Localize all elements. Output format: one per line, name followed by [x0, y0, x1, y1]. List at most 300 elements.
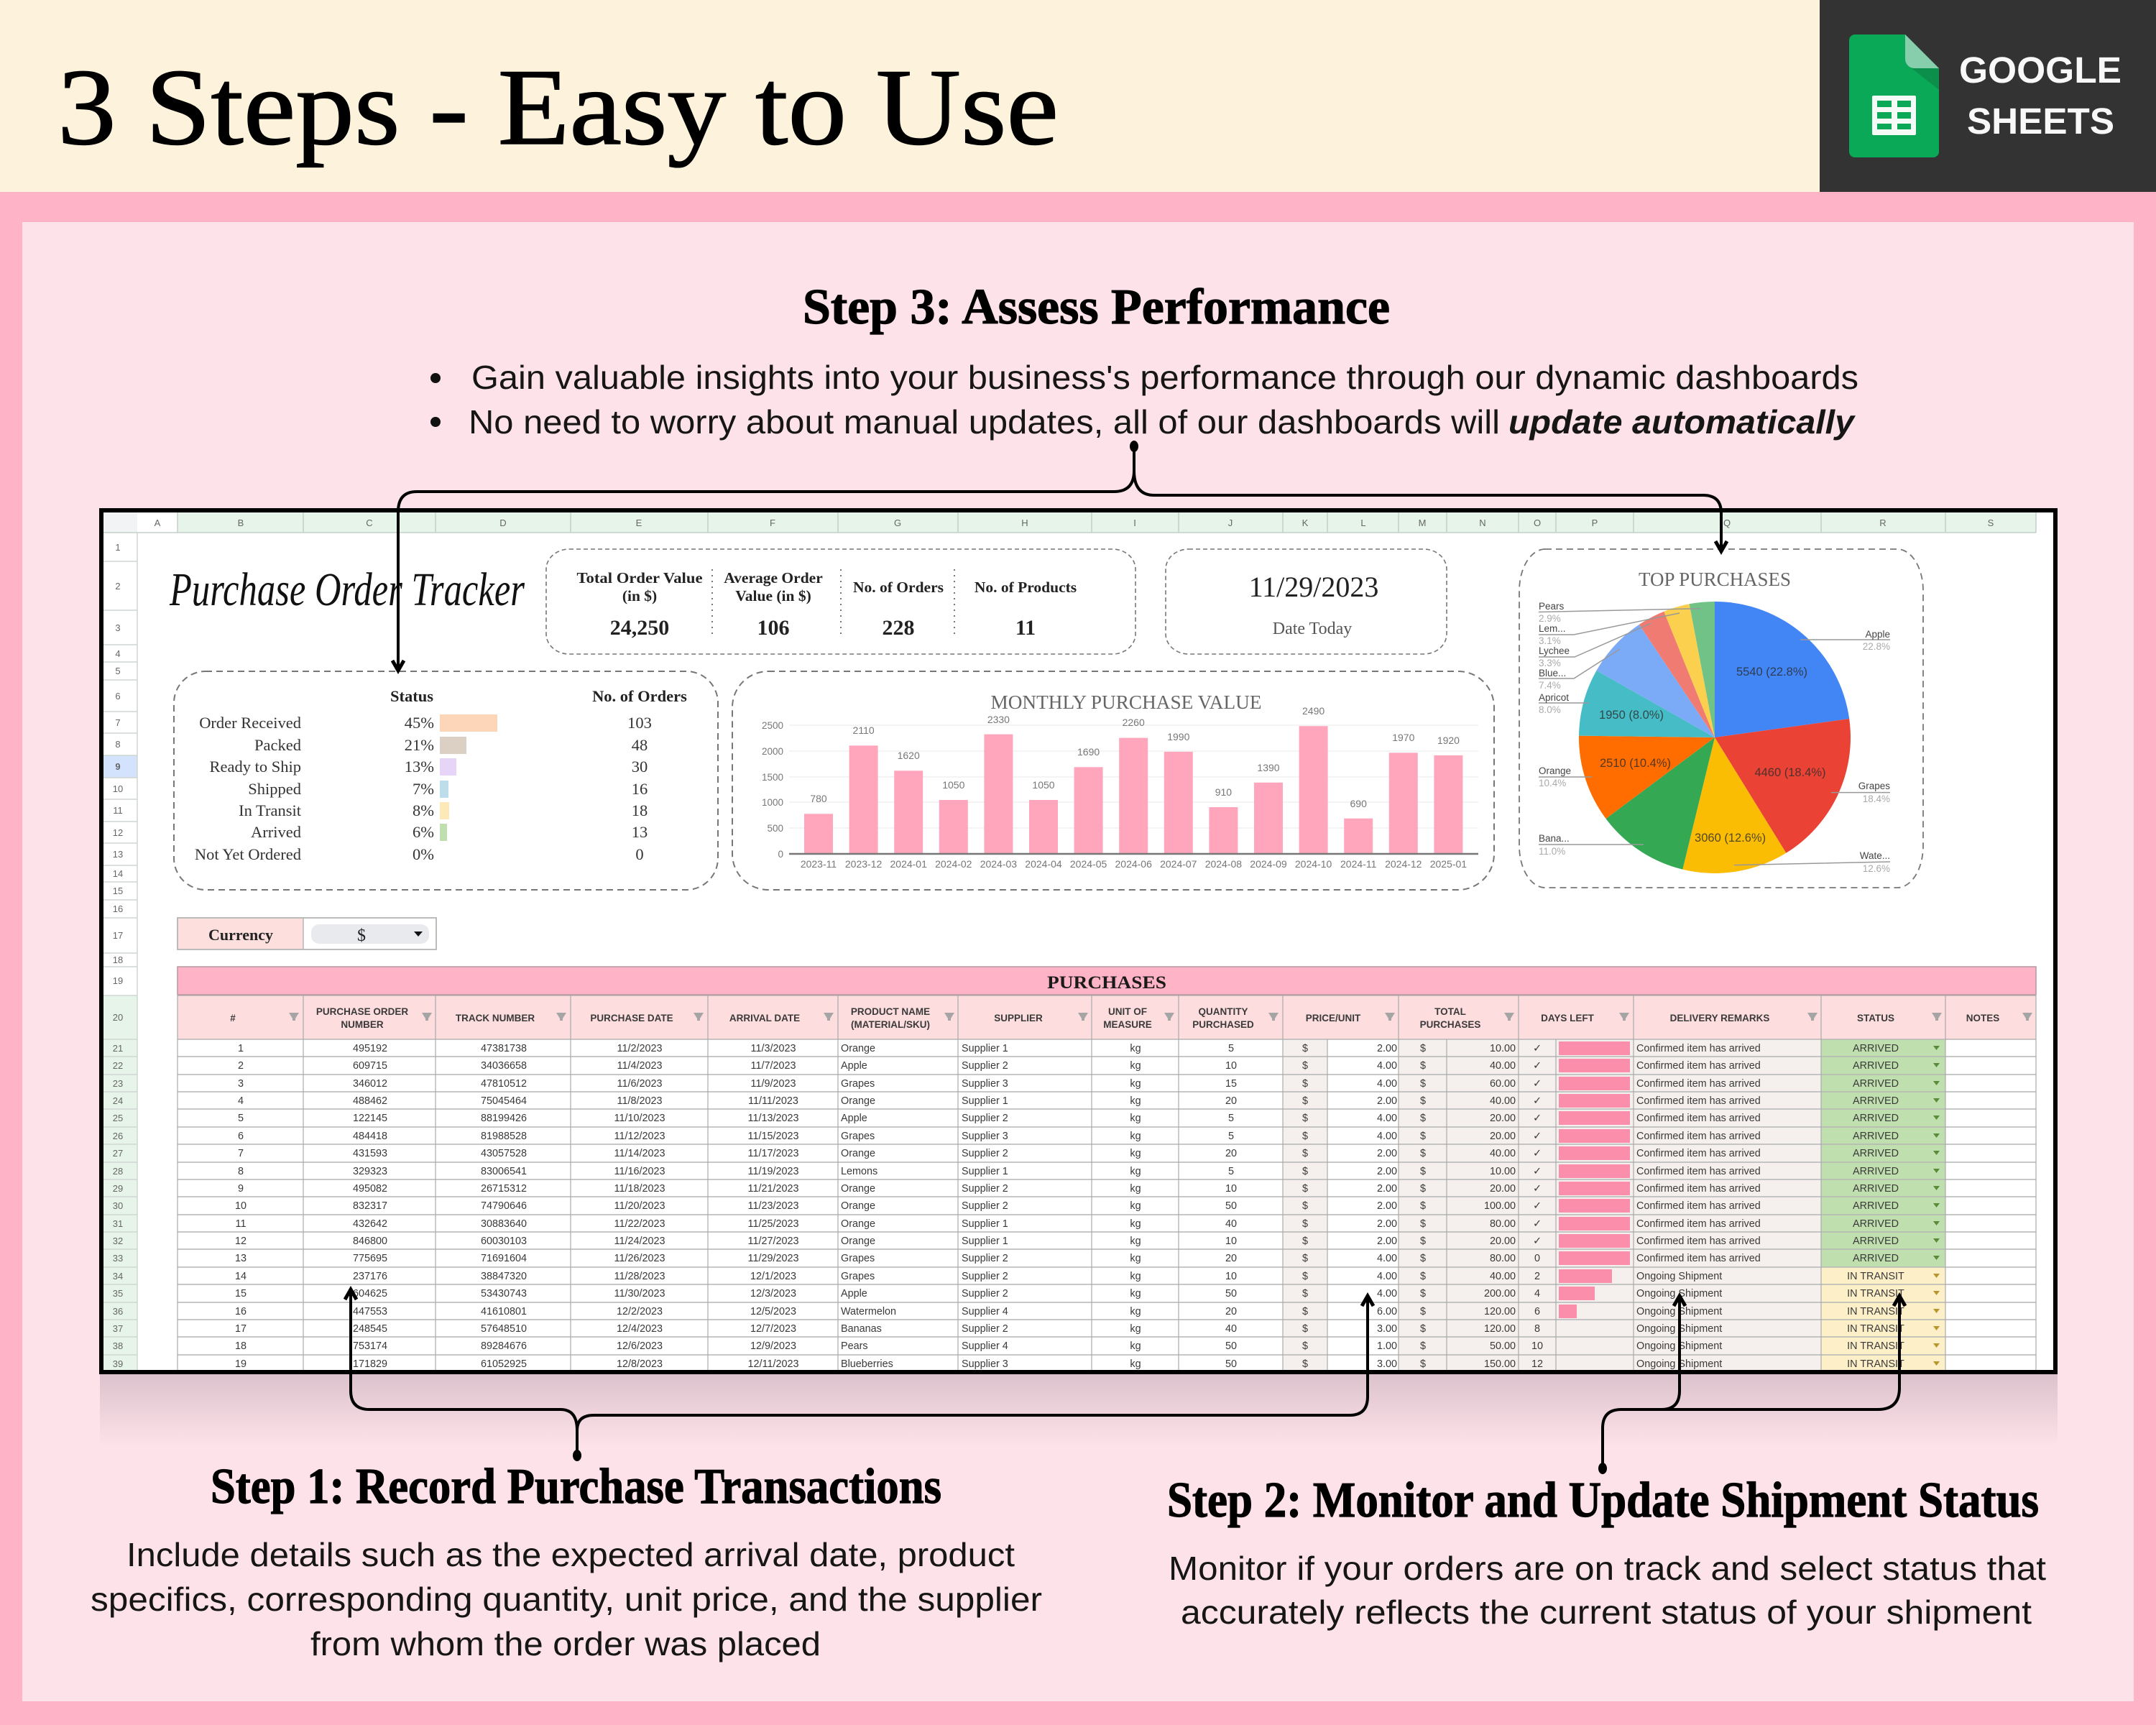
table row 8: 329323 [353, 1166, 387, 1177]
table row 2: 11/7/2023 [751, 1060, 796, 1072]
table row 12: ✓ [1533, 1236, 1542, 1247]
table: purchases [178, 967, 2036, 1371]
table row 12: Orange [841, 1236, 875, 1247]
table row 12: Confirmed item has arrived [1636, 1236, 1761, 1247]
table row 19: Supplier 3 [962, 1358, 1008, 1370]
bar value labels: 1050 [942, 779, 965, 791]
table column headers: PRODUCT NAME [851, 1006, 930, 1017]
column headers: B [238, 518, 244, 528]
table row 19: 61052925 [481, 1358, 527, 1370]
month labels: 2024-12 [1385, 858, 1422, 870]
table row 15: $ [1420, 1288, 1426, 1300]
column headers: P [1592, 518, 1598, 528]
table row 5 [238, 1113, 1940, 1124]
column headers: J [1228, 518, 1233, 528]
table row 3: 4.00 [1377, 1078, 1397, 1090]
table row 14: 10 [1225, 1271, 1237, 1282]
table row 6: $ [1420, 1131, 1426, 1142]
table row 14: kg [1130, 1271, 1141, 1282]
table row 16: $ [1302, 1306, 1308, 1317]
table row 16: 20 [1225, 1306, 1237, 1317]
table row 18: $ [1302, 1340, 1308, 1352]
panel: top purchases pie chart: TOP PURCHASES [1639, 569, 1791, 590]
table row 15: 604625 [353, 1288, 387, 1300]
table row 4: 20 [1225, 1095, 1237, 1107]
table row 7: $ [1302, 1148, 1308, 1159]
table row 11: 11/25/2023 [748, 1218, 798, 1230]
table row 14: Ongoing Shipment [1636, 1271, 1722, 1282]
y axis labels: 1000 [762, 797, 783, 808]
table row 13: kg [1130, 1253, 1141, 1264]
bar value labels: 1970 [1392, 732, 1415, 743]
status labels [195, 714, 652, 863]
table row 2: 11/4/2023 [617, 1060, 662, 1072]
table row 16: 6.00 [1377, 1306, 1397, 1317]
row headers: 32 [113, 1236, 123, 1246]
table row 9: 26715312 [481, 1183, 527, 1195]
table row 4: 11/11/2023 [748, 1095, 798, 1107]
table row 12: 60030103 [481, 1236, 527, 1247]
table row 12: $ [1420, 1236, 1426, 1247]
pie callout labels: Bana... [1539, 833, 1570, 844]
table row 17: 3.00 [1377, 1323, 1397, 1335]
column headers: N [1479, 518, 1486, 528]
status labels: Order Received [199, 714, 301, 732]
table row 10: 100.00 [1484, 1200, 1516, 1212]
table row 13: 11/29/2023 [748, 1253, 798, 1264]
pie callout labels: 3.1% [1539, 635, 1561, 646]
table row 4: $ [1420, 1095, 1426, 1107]
table row 9: 9 [238, 1183, 244, 1195]
row headers: 25 [113, 1113, 123, 1123]
table title band [178, 967, 2036, 995]
table row 3: 11/9/2023 [751, 1078, 796, 1090]
panel: KPI summary [546, 549, 1135, 654]
table row 16: 16 [235, 1306, 247, 1317]
pie callout labels: 3.3% [1539, 658, 1561, 668]
bar value labels: 690 [1350, 798, 1367, 809]
table row 1: Supplier 1 [962, 1043, 1008, 1054]
badge: Google Sheets [1820, 0, 2156, 192]
table row 7: $ [1420, 1148, 1426, 1159]
table row 1: $ [1420, 1043, 1426, 1054]
table row 8: 83006541 [481, 1166, 527, 1177]
row headers: 35 [113, 1288, 123, 1299]
row headers: 31 [113, 1218, 123, 1229]
status labels: Not Yet Ordered [195, 845, 301, 863]
table row 7: 431593 [353, 1148, 387, 1159]
table row 4: 488462 [353, 1095, 387, 1107]
table row 10: $ [1302, 1200, 1308, 1212]
table row 6: Confirmed item has arrived [1636, 1131, 1761, 1142]
text block: step 3 bullets: Gain valuable insights into your business's performance through our dynamic dashboards [471, 359, 1858, 396]
table row 5: $ [1302, 1113, 1308, 1124]
table row 11: Orange [841, 1218, 875, 1230]
table row 1: 1 [238, 1043, 244, 1054]
table row 4 [238, 1095, 1940, 1107]
bar value labels: 1990 [1167, 731, 1190, 742]
table row 12 [235, 1236, 1940, 1247]
month labels: 2023-11 [801, 858, 837, 870]
table row 17: 8 [1534, 1323, 1540, 1335]
currency selector: Currency [208, 926, 273, 944]
status labels: 6% [413, 823, 434, 841]
pie callout labels: Lem... [1539, 623, 1566, 634]
table row 3: 11/6/2023 [617, 1078, 662, 1090]
KPI: number of products [975, 579, 1077, 640]
table row 15: 200.00 [1484, 1288, 1516, 1300]
table row 9: Confirmed item has arrived [1636, 1183, 1761, 1195]
table row 14: Grapes [841, 1271, 875, 1282]
KPI: number of orders: No. of Orders [853, 579, 944, 596]
table row 2: Confirmed item has arrived [1636, 1060, 1761, 1072]
table row 9: $ [1420, 1183, 1426, 1195]
row headers: 17 [113, 930, 123, 941]
table column headers: DAYS LEFT [1541, 1013, 1595, 1024]
table row 9 [238, 1183, 1940, 1195]
table row 8: kg [1130, 1166, 1141, 1177]
KPI: average order value [724, 569, 823, 640]
table row 4: Orange [841, 1095, 875, 1107]
table column headers [178, 995, 2036, 1039]
table row 10: Confirmed item has arrived [1636, 1200, 1761, 1212]
table row 5: 122145 [353, 1113, 387, 1124]
pie callout labels: 2.9% [1539, 613, 1561, 624]
table row 13: 0 [1534, 1253, 1540, 1264]
table row 15: kg [1130, 1288, 1141, 1300]
table row 6: 484418 [353, 1131, 387, 1142]
column headers: Q [1723, 518, 1731, 528]
row headers: 30 [113, 1200, 123, 1211]
table row 6: ARRIVED [1853, 1131, 1899, 1142]
table row 16: Watermelon [841, 1306, 896, 1317]
table row 3: Confirmed item has arrived [1636, 1078, 1761, 1090]
month labels: 2024-09 [1250, 858, 1287, 870]
pie callout labels: 22.8% [1863, 641, 1890, 652]
table row 4: 75045464 [481, 1095, 527, 1107]
row headers: 37 [113, 1323, 123, 1334]
table row 9: 20.00 [1490, 1183, 1516, 1195]
row headers: 22 [113, 1060, 123, 1071]
table row 14: 237176 [353, 1271, 387, 1282]
status labels: 30 [632, 758, 648, 776]
table row 19: 50 [1225, 1358, 1237, 1370]
table row 12: kg [1130, 1236, 1141, 1247]
table row 10: 11/23/2023 [748, 1200, 798, 1212]
KPI: number of orders: 228 [883, 616, 914, 640]
column headers: K [1302, 518, 1309, 528]
y axis labels: 1500 [762, 772, 783, 783]
table row 19: 12/11/2023 [748, 1358, 798, 1370]
table row 12: Supplier 1 [962, 1236, 1008, 1247]
table row 13: 80.00 [1490, 1253, 1516, 1264]
KPI: total order value: Total Order Value [576, 569, 703, 586]
panel: date today: 11/29/2023 [1249, 571, 1378, 603]
table row 3: 3 [238, 1078, 244, 1090]
table row 9: ✓ [1533, 1183, 1542, 1195]
table column headers: # [230, 1013, 236, 1024]
table row 15: IN TRANSIT [1847, 1288, 1904, 1300]
text block: step 3 bullets: No need to worry about manual updates, all of our dashboards will [469, 403, 1500, 441]
badge label: SHEETS [1967, 101, 2114, 142]
table row 5: 4.00 [1377, 1113, 1397, 1124]
row headers: 6 [115, 691, 121, 702]
table row 10: Supplier 2 [962, 1200, 1008, 1212]
heading: step 2: Step 2: Monitor and Update Shipment Status [1167, 1473, 2039, 1528]
table row 18 [235, 1340, 1940, 1352]
arrow: step 1 bracket [345, 1289, 1373, 1461]
table row 16: IN TRANSIT [1847, 1306, 1904, 1317]
table row 5: ARRIVED [1853, 1113, 1899, 1124]
table row 18: 753174 [353, 1340, 387, 1352]
status labels: 48 [632, 736, 648, 754]
table row 1: 11/2/2023 [617, 1043, 662, 1054]
table row 9: kg [1130, 1183, 1141, 1195]
table row 13 [235, 1253, 1940, 1264]
table row 3: 47810512 [481, 1078, 527, 1090]
table row 5: 5 [238, 1113, 244, 1124]
month labels: 2024-03 [980, 858, 1017, 870]
table row 7: 2.00 [1377, 1148, 1397, 1159]
column headers: G [894, 518, 901, 528]
table row 11: $ [1420, 1218, 1426, 1230]
table row 11: $ [1302, 1218, 1308, 1230]
pie value labels: 4460 (18.4%) [1754, 766, 1826, 779]
table row 6: ✓ [1533, 1131, 1542, 1142]
table row 10: $ [1420, 1200, 1426, 1212]
table row 17: Supplier 2 [962, 1323, 1008, 1335]
y axis labels: 0 [778, 849, 783, 860]
badge label: GOOGLE [1959, 50, 2122, 91]
pie callout labels: 10.4% [1539, 778, 1566, 788]
table row 17: $ [1302, 1323, 1308, 1335]
panel: order status: No. of Orders [592, 687, 687, 705]
table row 7: Confirmed item has arrived [1636, 1148, 1761, 1159]
table row 3: Grapes [841, 1078, 875, 1090]
table row 16: 12/5/2023 [750, 1306, 796, 1317]
table row 18: 50 [1225, 1340, 1237, 1352]
y axis labels: 2000 [762, 746, 783, 757]
bar value labels: 2260 [1123, 717, 1145, 728]
table row 1: 5 [1228, 1043, 1234, 1054]
table row 6: 5 [1228, 1131, 1234, 1142]
table row 16 [235, 1306, 1940, 1317]
y axis labels [762, 720, 783, 860]
table row 16: 447553 [353, 1306, 387, 1317]
status labels: Arrived [251, 823, 301, 841]
arrow: step 3 bracket [392, 441, 1727, 671]
row headers [103, 533, 137, 1371]
bar value labels: 2110 [853, 724, 875, 736]
table column headers: PURCHASE DATE [590, 1013, 673, 1024]
table row 2 [238, 1060, 1940, 1072]
table row 3: $ [1302, 1078, 1308, 1090]
table row 2: 4.00 [1377, 1060, 1397, 1072]
column headers: O [1534, 518, 1541, 528]
column headers: H [1021, 518, 1028, 528]
table row 5: Apple [841, 1113, 867, 1124]
panel: monthly purchase value chart: MONTHLY PURCHASE VALUE [990, 691, 1262, 713]
title: 3 Steps - Easy to Use [57, 47, 1059, 167]
table row 12: 11/27/2023 [748, 1236, 798, 1247]
status labels: 18 [632, 801, 648, 819]
table row 7: 40.00 [1490, 1148, 1516, 1159]
bar value labels: 1390 [1257, 762, 1280, 773]
table row 14: IN TRANSIT [1847, 1271, 1904, 1282]
text block: step 3 bullets: update automatically [1508, 403, 1856, 441]
heading: step 3: Step 3: Assess Performance [803, 280, 1390, 335]
table row 12: 846800 [353, 1236, 387, 1247]
pie callout labels: Pears [1539, 601, 1565, 612]
table row 10 [235, 1200, 1940, 1212]
table row 9: ARRIVED [1853, 1183, 1899, 1195]
status labels: 45% [405, 714, 434, 732]
table row 13: Confirmed item has arrived [1636, 1253, 1761, 1264]
table row 2: 34036658 [481, 1060, 527, 1072]
table row 11: 30883640 [481, 1218, 527, 1230]
table row 3: Supplier 3 [962, 1078, 1008, 1090]
month labels: 2024-08 [1205, 858, 1242, 870]
table row 4: 40.00 [1490, 1095, 1516, 1107]
table cell fills [1283, 1039, 1945, 1371]
table row 2: 40.00 [1490, 1060, 1516, 1072]
table row 7: 7 [238, 1148, 244, 1159]
pie callout labels: Wate... [1860, 850, 1890, 861]
row headers: 19 [113, 975, 123, 986]
table row 17: kg [1130, 1323, 1141, 1335]
month labels: 2024-01 [890, 858, 927, 870]
table column headers: TOTAL [1434, 1006, 1466, 1017]
table row 18: 10 [1531, 1340, 1543, 1352]
table row 5: 5 [1228, 1113, 1234, 1124]
table row 15: Ongoing Shipment [1636, 1288, 1722, 1300]
table column headers: PRICE/UNIT [1306, 1013, 1361, 1024]
table row 6 [238, 1131, 1940, 1142]
table row 15: $ [1302, 1288, 1308, 1300]
row headers: 7 [115, 717, 121, 728]
bars [804, 726, 1462, 854]
table row 14 [235, 1271, 1940, 1282]
KPI: total order value: (in $) [622, 587, 657, 604]
table row 13: 71691604 [481, 1253, 527, 1264]
table row 4: 11/8/2023 [617, 1095, 662, 1107]
row headers: 20 [113, 1012, 123, 1023]
table row 7 [238, 1148, 1940, 1159]
table row 19: kg [1130, 1358, 1141, 1370]
table row 15 [235, 1288, 1940, 1300]
table row 2: 10 [1225, 1060, 1237, 1072]
table row 11: 11 [236, 1218, 246, 1230]
table row 5: 20.00 [1490, 1113, 1516, 1124]
table row 18: kg [1130, 1340, 1141, 1352]
table row 7: Supplier 2 [962, 1148, 1008, 1159]
KPI: number of orders [853, 579, 944, 640]
spreadsheet screenshot [101, 510, 2055, 1372]
table row 19: 19 [235, 1358, 247, 1370]
table row 9: Orange [841, 1183, 875, 1195]
table row 15: 53430743 [481, 1288, 527, 1300]
pie callout labels: 8.0% [1539, 704, 1561, 715]
table row 18: 89284676 [481, 1340, 527, 1352]
table row 6: 11/15/2023 [748, 1131, 798, 1142]
table row 9: 11/18/2023 [614, 1183, 665, 1195]
table row 3: kg [1130, 1078, 1141, 1090]
table row 19: $ [1420, 1358, 1426, 1370]
row headers: 9 [115, 761, 121, 772]
table row 4: ✓ [1533, 1095, 1542, 1107]
table row 1: 10.00 [1490, 1043, 1516, 1054]
table column headers: DELIVERY REMARKS [1670, 1013, 1769, 1024]
table row 18: IN TRANSIT [1847, 1340, 1904, 1352]
row headers: 18 [113, 954, 123, 965]
status labels: 0% [413, 845, 434, 863]
table row 13: ARRIVED [1853, 1253, 1899, 1264]
bar value labels: 1920 [1437, 735, 1460, 746]
row headers: 4 [115, 648, 121, 659]
table row 3: ARRIVED [1853, 1078, 1899, 1090]
table row 11 [236, 1218, 1940, 1230]
table row 2: ARRIVED [1853, 1060, 1899, 1072]
KPI: total order value: 24,250 [610, 616, 669, 640]
table row 18: 50.00 [1490, 1340, 1516, 1352]
icon: Google Sheets document [1849, 34, 1939, 157]
column headers: F [770, 518, 775, 528]
month labels: 2024-11 [1340, 858, 1377, 870]
panel: order status: Status [390, 687, 433, 705]
column headers [103, 512, 2036, 533]
spreadsheet frame [101, 510, 2055, 1372]
currency selector [178, 918, 436, 949]
table row 1: 2.00 [1377, 1043, 1397, 1054]
table row 19: Ongoing Shipment [1636, 1358, 1722, 1370]
table row 10: 50 [1225, 1200, 1237, 1212]
table row 6: $ [1302, 1131, 1308, 1142]
table row 8 [238, 1166, 1940, 1177]
table row 3: $ [1420, 1078, 1426, 1090]
table row 12: 20.00 [1490, 1236, 1516, 1247]
bar value labels [810, 705, 1460, 809]
panel: order status [174, 671, 718, 890]
row headers: 15 [113, 886, 123, 896]
table row 14: $ [1420, 1271, 1426, 1282]
header band [0, 0, 1820, 192]
table row 6: 6 [238, 1131, 244, 1142]
table row 10: 2.00 [1377, 1200, 1397, 1212]
table row 13: $ [1420, 1253, 1426, 1264]
table row 19 [235, 1358, 1940, 1370]
table row 13: 13 [235, 1253, 247, 1264]
table row 8: $ [1302, 1166, 1308, 1177]
row headers: 13 [113, 849, 123, 860]
table row 1: kg [1130, 1043, 1141, 1054]
table row 14: $ [1302, 1271, 1308, 1282]
pie callout labels: 7.4% [1539, 680, 1561, 691]
table row 12: $ [1302, 1236, 1308, 1247]
table row 14: 4.00 [1377, 1271, 1397, 1282]
row headers: 34 [113, 1271, 123, 1282]
table row 1: 495192 [353, 1043, 387, 1054]
table row 16: 6 [1534, 1306, 1540, 1317]
table row 11: ARRIVED [1853, 1218, 1899, 1230]
table row 9: 11/21/2023 [748, 1183, 798, 1195]
KPI: number of products: No. of Products [975, 579, 1077, 596]
table row 14: 2 [1534, 1271, 1540, 1282]
table row 1: 11/3/2023 [751, 1043, 796, 1054]
month labels: 2025-01 [1430, 858, 1467, 870]
table row 12: 12 [235, 1236, 247, 1247]
table row 2: ✓ [1533, 1060, 1542, 1072]
column headers: I [1133, 518, 1136, 528]
